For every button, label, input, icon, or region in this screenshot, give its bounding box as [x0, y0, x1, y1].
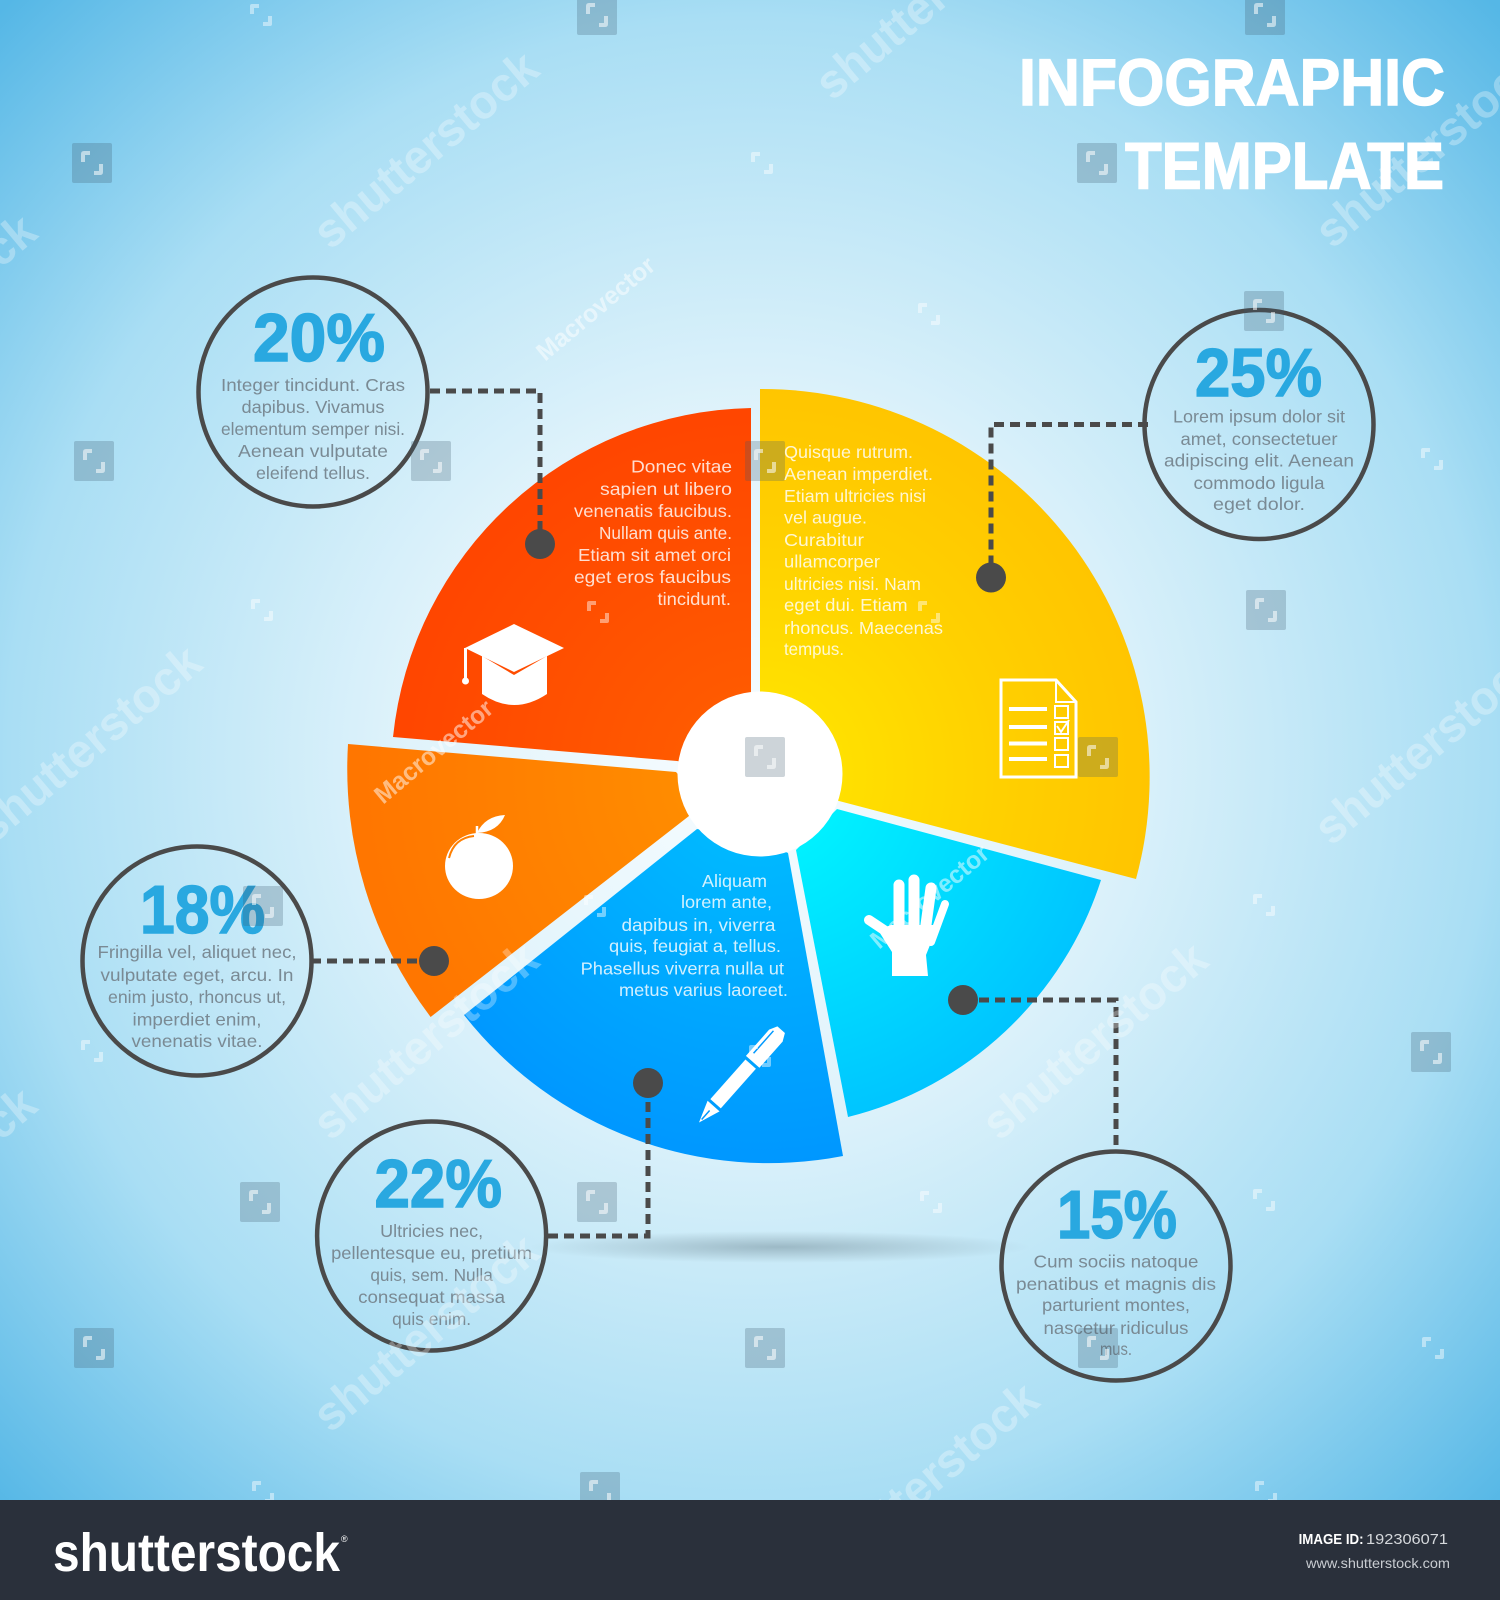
circle outline: [82, 846, 312, 1076]
text: yellow segment: Aenean imperdiet.: [784, 464, 933, 484]
icon: fountain pen: [692, 1024, 788, 1128]
value: 15%: [1057, 1177, 1177, 1253]
description: amet, consectetuer: [1180, 429, 1338, 449]
text: yellow segment: ullamcorper: [784, 552, 880, 572]
text: yellow segment: [784, 442, 943, 659]
description: [98, 942, 296, 1051]
value: 22%: [374, 1146, 502, 1222]
segment: orange 18%: [347, 744, 700, 1017]
text: red segment: eget eros faucibus: [574, 567, 731, 587]
value: 18%: [140, 872, 265, 948]
image id: 192306071: [1366, 1531, 1448, 1548]
text: red segment: venenatis faucibus.: [574, 501, 732, 521]
text: yellow segment: tempus.: [784, 639, 844, 659]
image id: IMAGE ID:: [1299, 1531, 1364, 1548]
watermark: shutterstock text: shutterstock: [303, 932, 549, 1150]
text: yellow segment: Curabitur: [784, 530, 864, 550]
title: [1019, 45, 1445, 202]
description: nascetur ridiculus: [1044, 1318, 1189, 1338]
watermark: Macrovector text: Macrovector: [369, 694, 499, 810]
description: Aenean vulputate: [238, 441, 388, 461]
description: dapibus. Vivamus: [242, 397, 385, 417]
text: red segment: Nullam quis ante.: [599, 523, 732, 543]
text: yellow segment: Etiam ultricies nisi: [784, 486, 926, 506]
text: blue segment: [581, 871, 788, 1000]
footer bar: [0, 1500, 1500, 1600]
description: consequat massa: [358, 1287, 505, 1307]
circle outline: [198, 278, 428, 506]
description: imperdiet enim,: [132, 1010, 262, 1030]
text: yellow segment: Quisque rutrum.: [784, 442, 913, 462]
value: 25%: [1195, 335, 1322, 411]
description: venenatis vitae.: [132, 1031, 262, 1051]
footer logo: shutterstock: [53, 1523, 341, 1583]
callout: 18%: [82, 846, 312, 1076]
watermark: shutterstock text: shutterstock: [803, 1372, 1049, 1590]
description: [331, 1221, 532, 1329]
description: quis, sem. Nulla: [370, 1265, 493, 1285]
image id: [1299, 1531, 1448, 1548]
title: TEMPLATE: [1125, 128, 1444, 202]
text: red segment: Etiam sit amet orci: [578, 545, 731, 565]
description: Lorem ipsum dolor sit: [1173, 406, 1345, 426]
pie shadow: [530, 1231, 1030, 1263]
description: Integer tincidunt. Cras: [221, 375, 405, 395]
text: blue segment: Phasellus viverra nulla ut: [581, 958, 784, 978]
watermark: shutterstock text: shutterstock: [303, 41, 549, 259]
text: blue segment: dapibus in, viverra: [622, 915, 776, 935]
segment: blue 22%: [464, 829, 843, 1163]
value: 20%: [253, 300, 385, 376]
icon: checklist document: [1001, 680, 1076, 777]
description: parturient montes,: [1042, 1295, 1190, 1315]
text: blue segment: quis, feugiat a, tellus.: [609, 936, 781, 956]
description: [1016, 1252, 1216, 1359]
callout: 15%: [1002, 1152, 1230, 1380]
description: mus.: [1100, 1339, 1132, 1359]
icon: hand: [869, 880, 945, 976]
description: penatibus et magnis dis: [1016, 1274, 1216, 1294]
marker dots: [419, 529, 1006, 1098]
text: blue segment: lorem ante,: [681, 892, 772, 912]
icon: graduation cap: [462, 624, 564, 705]
callout: 20%: [198, 278, 428, 506]
segment: cyan 15%: [796, 809, 1101, 1117]
website: www.shutterstock.com: [1305, 1555, 1450, 1571]
watermark: Macrovector text: Macrovector: [531, 251, 661, 367]
text: red segment: Donec vitae: [631, 456, 732, 476]
text: red segment: tincidunt.: [658, 589, 731, 609]
description: Cum sociis natoque: [1034, 1252, 1198, 1272]
circle outline: [1002, 1152, 1230, 1380]
callout: 25%: [1144, 310, 1374, 539]
text: yellow segment: rhoncus. Maecenas: [784, 618, 943, 638]
text: blue segment: metus varius laoreet.: [619, 980, 788, 1000]
text: yellow segment: ultricies nisi. Nam: [784, 574, 921, 594]
circle outline: [1144, 310, 1374, 539]
description: vulputate eget, arcu. In: [100, 965, 294, 985]
watermark: Macrovector text: Macrovector: [865, 839, 995, 955]
text: red segment: sapien ut libero: [600, 479, 732, 499]
description: pellentesque eu, pretium: [331, 1243, 532, 1263]
text: yellow segment: eget dui. Etiam: [784, 595, 908, 615]
icon: apple: [445, 815, 513, 899]
watermark: shutterstock text: shutterstock: [303, 1224, 549, 1442]
description: eleifend tellus.: [256, 463, 370, 483]
description: eget dolor.: [1213, 494, 1305, 514]
description: Ultricies nec,: [380, 1221, 483, 1241]
pie chart: [347, 389, 1150, 1163]
text: yellow segment: vel augue.: [784, 508, 867, 528]
description: adipiscing elit. Aenean: [1164, 450, 1354, 470]
description: commodo ligula: [1194, 473, 1325, 493]
watermark: Macrovector text: [369, 251, 995, 955]
watermark: shutterstock text: shutterstock: [972, 932, 1218, 1150]
text: red segment: [574, 456, 732, 609]
title: INFOGRAPHIC: [1019, 45, 1445, 119]
description: quis enim.: [392, 1309, 471, 1329]
description: Fringilla vel, aliquet nec,: [98, 942, 296, 962]
description: enim justo, rhoncus ut,: [108, 987, 286, 1007]
connector lines: [311, 391, 1148, 1236]
circle outline: [317, 1122, 546, 1350]
registered mark: ®: [341, 1534, 348, 1544]
segment: red 20%: [393, 408, 751, 775]
description: elementum semper nisi.: [221, 419, 405, 439]
description: [1164, 406, 1354, 514]
text: blue segment: Aliquam: [702, 871, 767, 891]
segment: yellow 25%: [760, 389, 1150, 879]
description: [221, 375, 405, 483]
centre hub: [678, 692, 842, 856]
callout: 22%: [317, 1122, 546, 1350]
